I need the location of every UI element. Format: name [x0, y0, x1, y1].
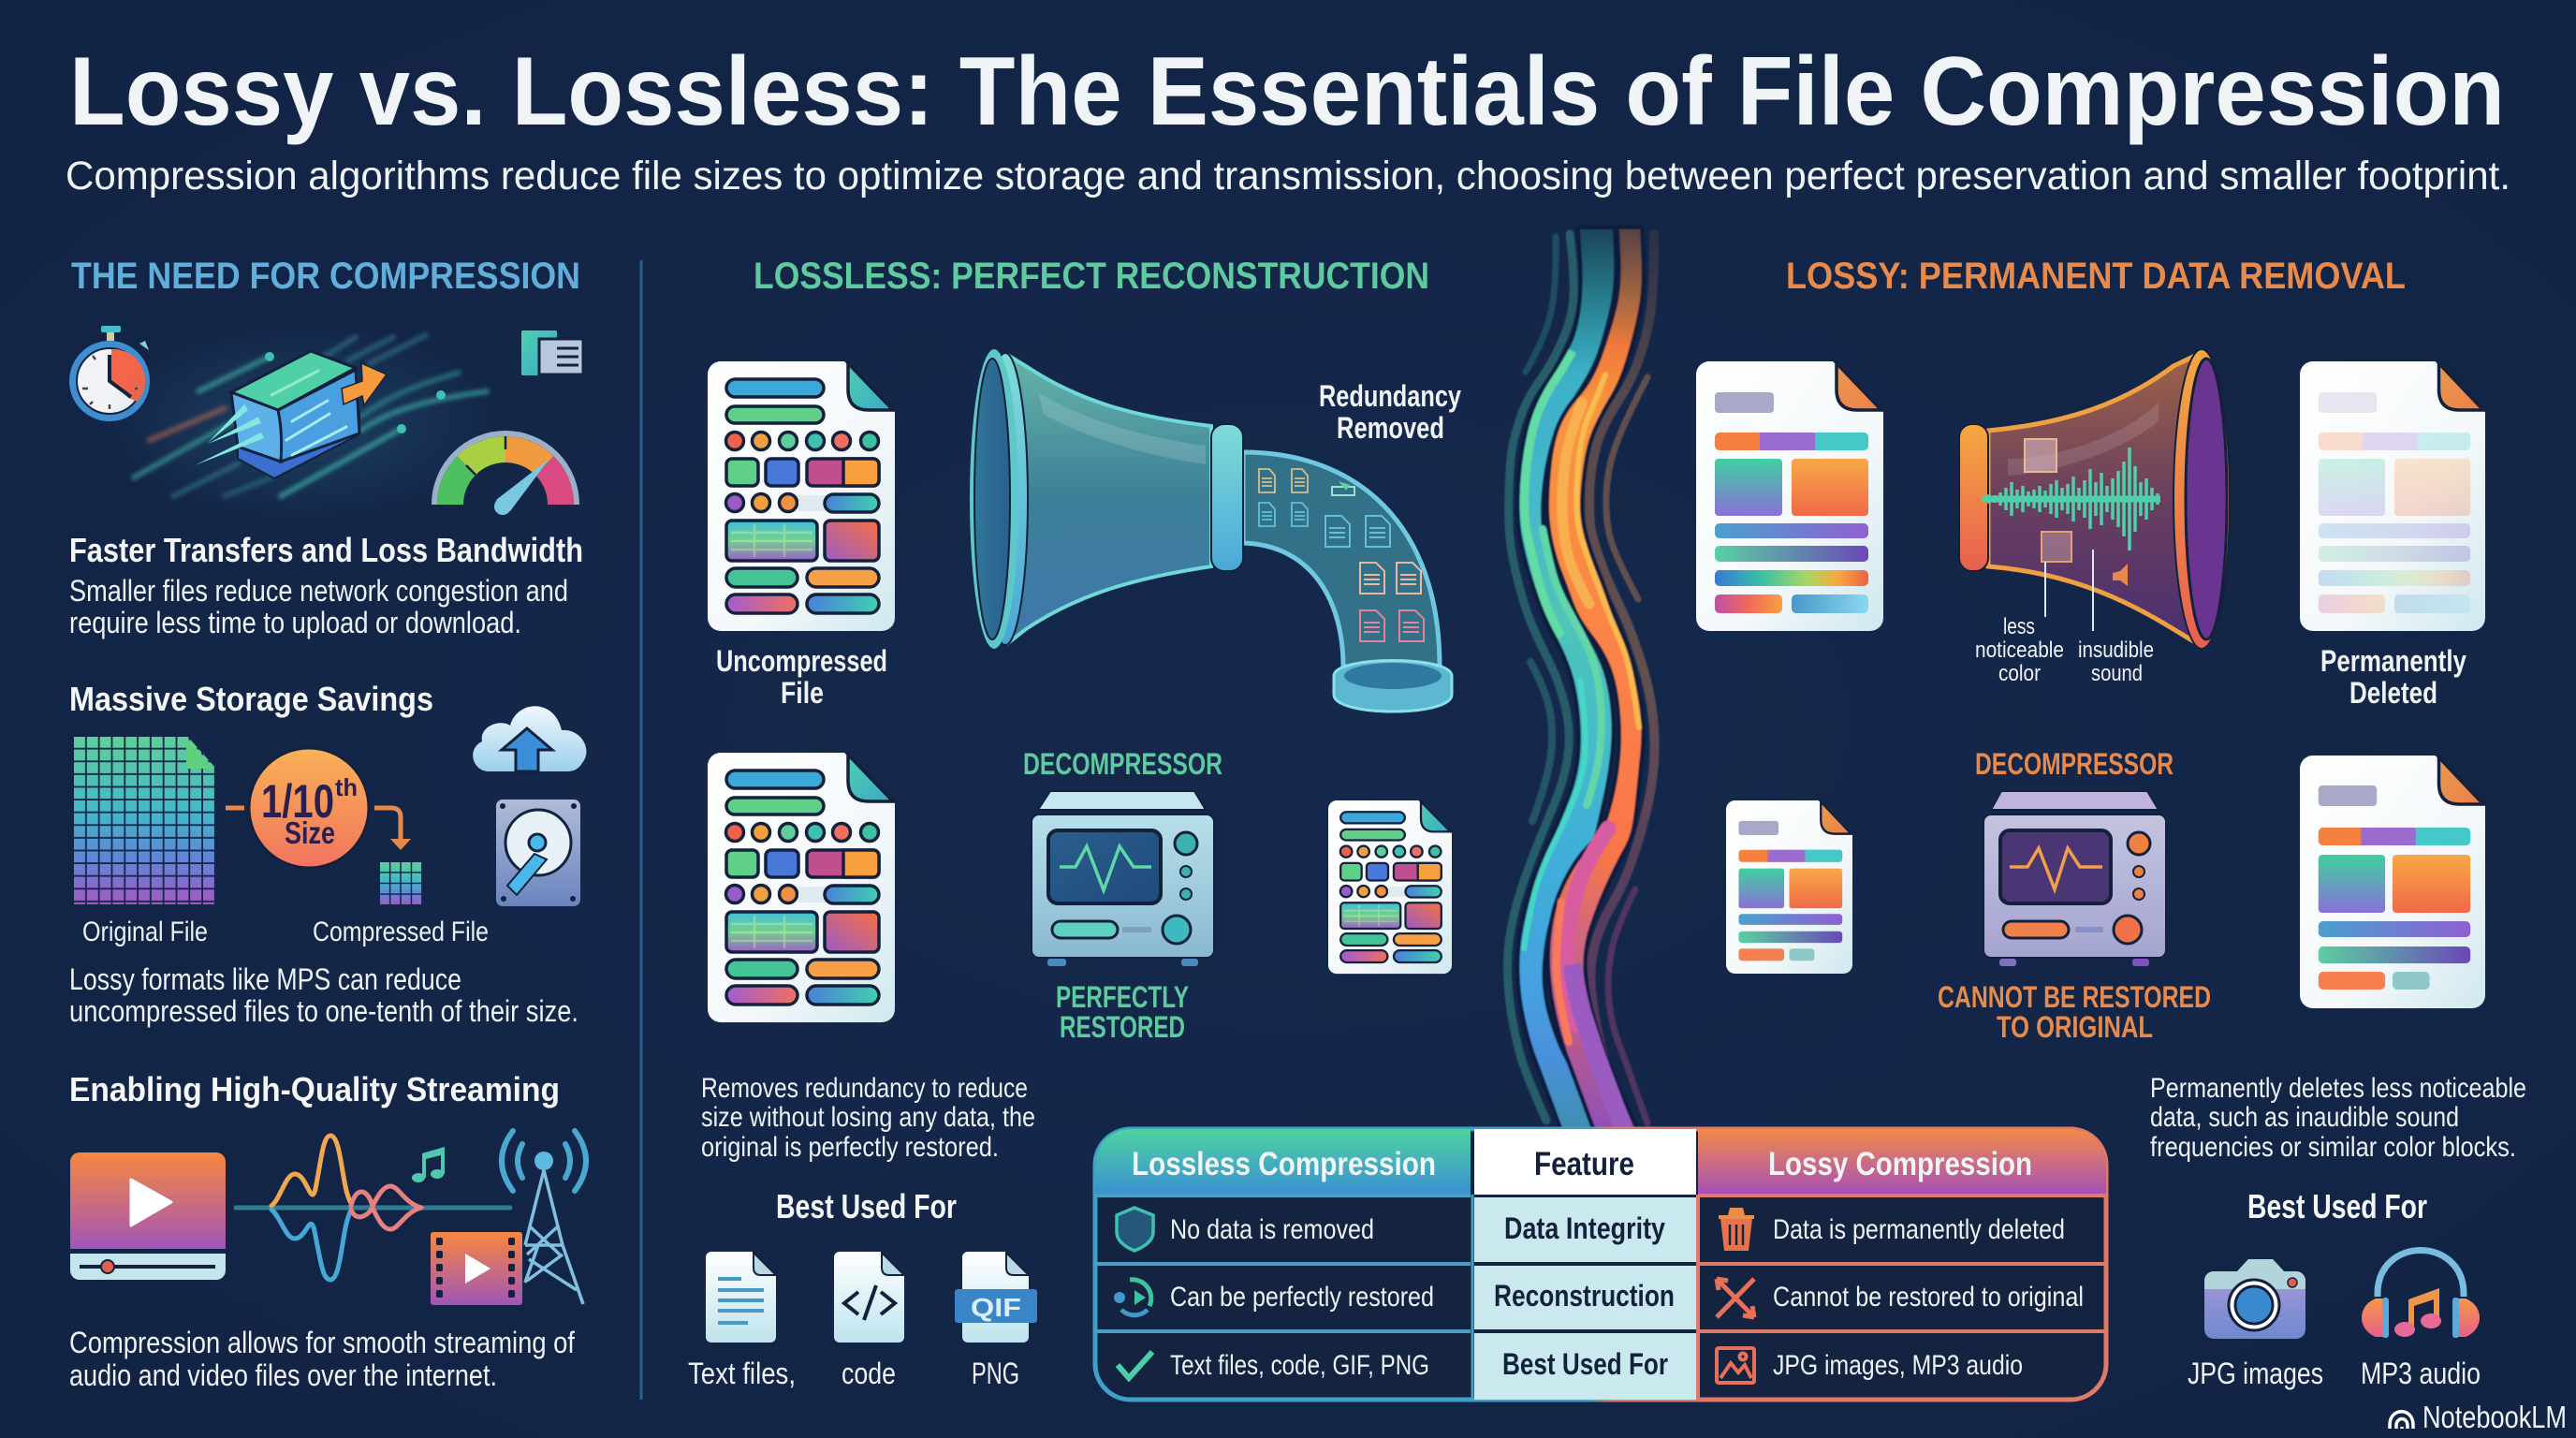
heading: best used for lossless: Best Used For: [776, 1187, 957, 1225]
label: less noticeable color: color: [1998, 661, 2041, 686]
heading: lossy: LOSSY: PERMANENT DATA REMOVAL: [1786, 256, 2406, 297]
icon: uncompressed file: [708, 361, 895, 631]
icon: trash: [1719, 1208, 1754, 1251]
icon: faded deleted file: [2300, 361, 2485, 631]
text: lossless description: original is perfectly restored.: [701, 1132, 999, 1163]
heading: streaming: Enabling High-Quality Streaming: [69, 1070, 560, 1108]
heading: need for compression: THE NEED FOR COMPRESSION: [71, 256, 580, 297]
icon: file stack: [521, 330, 583, 375]
cell: data integrity: Data Integrity: [1504, 1211, 1665, 1245]
icon: music note: [412, 1147, 445, 1182]
label: permanently deleted: Permanently: [2320, 644, 2466, 678]
icon: gif png file: QIF: [971, 1293, 1021, 1322]
text: lossy description: data, such as inaudible sound: [2150, 1102, 2459, 1133]
text: storage savings: uncompressed files to one-tenth of their size.: [69, 994, 578, 1028]
icon: text file: [706, 1252, 776, 1343]
cell: no data removed: No data is removed: [1170, 1214, 1374, 1245]
icon: original lossy file: [1696, 361, 1883, 631]
callout: one tenth size badge: [226, 748, 411, 868]
text: faster transfers: [69, 574, 568, 639]
label: cannot be restored: [1938, 980, 2211, 1044]
label: jpg images: JPG images: [2188, 1357, 2323, 1390]
graphic: wave ribbon divider: [1507, 229, 1655, 1130]
icon: broadcast tower: [502, 1131, 586, 1304]
icon: small compressed lossy file: [1726, 800, 1852, 974]
label: permanently deleted: Deleted: [2349, 676, 2437, 710]
graphic: original file grid: [74, 735, 216, 904]
icon: cloud upload: [473, 706, 586, 771]
icon: stopwatch: [73, 326, 149, 418]
label: redundancy removed: Removed: [1337, 411, 1444, 445]
panel: lossy: [1696, 256, 2526, 1390]
icon: restored file: [708, 753, 895, 1022]
label: uncompressed file: File: [781, 676, 824, 710]
text: storage savings: Lossy formats like MPS can reduce: [69, 962, 461, 996]
text: faster transfers: require less time to upload or download.: [69, 606, 521, 639]
text: lossy description: frequencies or similar color blocks.: [2150, 1132, 2516, 1163]
label: less noticeable color: [1975, 614, 2064, 686]
label: uncompressed file: [716, 644, 887, 710]
cell: cannot be restored: Cannot be restored to original: [1773, 1282, 2084, 1313]
label: less noticeable color: noticeable: [1975, 638, 2064, 663]
label: uncompressed file: Uncompressed: [716, 644, 887, 678]
label: redundancy removed: [1319, 379, 1461, 445]
icon: video player: [70, 1152, 226, 1280]
label: perfectly restored: PERFECTLY: [1056, 980, 1189, 1014]
icon: camera: [2204, 1259, 2305, 1339]
icon: compressed box with speed lines: [103, 323, 496, 520]
text: lossless description: Removes redundancy to reduce: [701, 1073, 1028, 1104]
label: decompressor: DECOMPRESSOR: [1023, 747, 1222, 781]
callout: one tenth size badge: th: [335, 773, 358, 801]
icon: gif png file: [955, 1252, 1037, 1343]
label: cannot be restored: TO ORIGINAL: [1997, 1010, 2153, 1044]
panel: the need for compression: [69, 256, 586, 1392]
text: storage savings: [69, 962, 578, 1028]
callout: one tenth size badge: Size: [285, 815, 335, 850]
label: mp3 audio: MP3 audio: [2361, 1357, 2481, 1390]
label: cannot be restored: CANNOT BE RESTORED: [1938, 980, 2211, 1014]
icon: hard drive: [496, 800, 580, 906]
icon: compressed small file: [1328, 800, 1452, 974]
table header: lossless: Lossless Compression: [1132, 1146, 1436, 1182]
cell: permanently deleted: Data is permanently deleted: [1773, 1214, 2065, 1245]
label: insudible sound: sound: [2091, 661, 2143, 686]
cell: jpg mp3: JPG images, MP3 audio: [1773, 1350, 2023, 1381]
graphic: compressed file grid: [380, 862, 422, 905]
label: text files: Text files,: [688, 1357, 796, 1390]
heading: faster transfers: Faster Transfers and Loss Bandwidth: [69, 531, 583, 569]
graphic: lossless compression funnel: [970, 349, 1452, 712]
label: png: PNG: [972, 1357, 1019, 1390]
panel: lossless: [688, 256, 1461, 1390]
heading: best used for lossy: Best Used For: [2247, 1187, 2427, 1225]
table header: lossy: Lossy Compression: [1768, 1146, 2032, 1182]
icon: lossy decompressor machine: [1983, 791, 2166, 966]
heading: storage savings: Massive Storage Savings: [69, 680, 433, 718]
label: insudible sound: insudible: [2078, 638, 2154, 663]
label: perfectly restored: RESTORED: [1060, 1010, 1185, 1044]
text: faster transfers: Smaller files reduce network congestion and: [69, 574, 568, 608]
cell: reconstruction: Reconstruction: [1494, 1279, 1675, 1313]
table header: feature: Feature: [1534, 1146, 1634, 1182]
icon: code file: [834, 1252, 904, 1343]
cell: can be restored: Can be perfectly restored: [1170, 1282, 1434, 1313]
icon: shield: [1117, 1208, 1153, 1251]
icon: restore cycle: [1114, 1280, 1151, 1315]
cell: best used for: Best Used For: [1502, 1347, 1668, 1381]
callout: one tenth size badge: 1/10: [261, 775, 334, 828]
graphic: audio waveform: [236, 1136, 510, 1280]
icon: image: [1717, 1348, 1754, 1383]
icon: speed gauge: [434, 433, 577, 515]
text: lossy description: [2150, 1073, 2526, 1163]
heading: lossless: LOSSLESS: PERFECT RECONSTRUCTION: [754, 256, 1429, 297]
icon: headphones with note: [2362, 1251, 2480, 1338]
label: original file: Original File: [82, 917, 208, 947]
text: streaming: [69, 1326, 575, 1392]
text: streaming: Compression allows for smooth streaming of: [69, 1326, 575, 1359]
label: redundancy removed: Redundancy: [1319, 379, 1461, 413]
label: perfectly restored: [1056, 980, 1189, 1044]
text: lossless description: size without losing any data, the: [701, 1102, 1035, 1133]
subtitle: Compression algorithms reduce file sizes to optimize storage and transmission, choosing between perfect preservation and smaller footprint.: [66, 154, 2510, 198]
graphic: lossy compression funnel: [1959, 349, 2230, 649]
text: streaming: audio and video files over the internet.: [69, 1358, 497, 1392]
icon: check mark: [1118, 1352, 1152, 1378]
icon: film strip: [431, 1232, 522, 1305]
label: decompressor lossy: DECOMPRESSOR: [1975, 747, 2174, 781]
label: insudible sound: [2078, 638, 2154, 686]
label: compressed file: Compressed File: [313, 917, 489, 947]
icon: restored lossy file: [2300, 756, 2485, 1008]
label: code: code: [842, 1357, 896, 1390]
label: less noticeable color: less: [2003, 614, 2035, 639]
icon: crossed arrows: [1717, 1279, 1754, 1317]
text: lossless description: [701, 1073, 1035, 1163]
table: comparison: [1095, 1129, 2106, 1400]
cell: text files code: Text files, code, GIF, PNG: [1170, 1350, 1429, 1381]
label: permanently deleted: [2320, 644, 2466, 710]
icon: decompressor machine: [1032, 791, 1214, 966]
